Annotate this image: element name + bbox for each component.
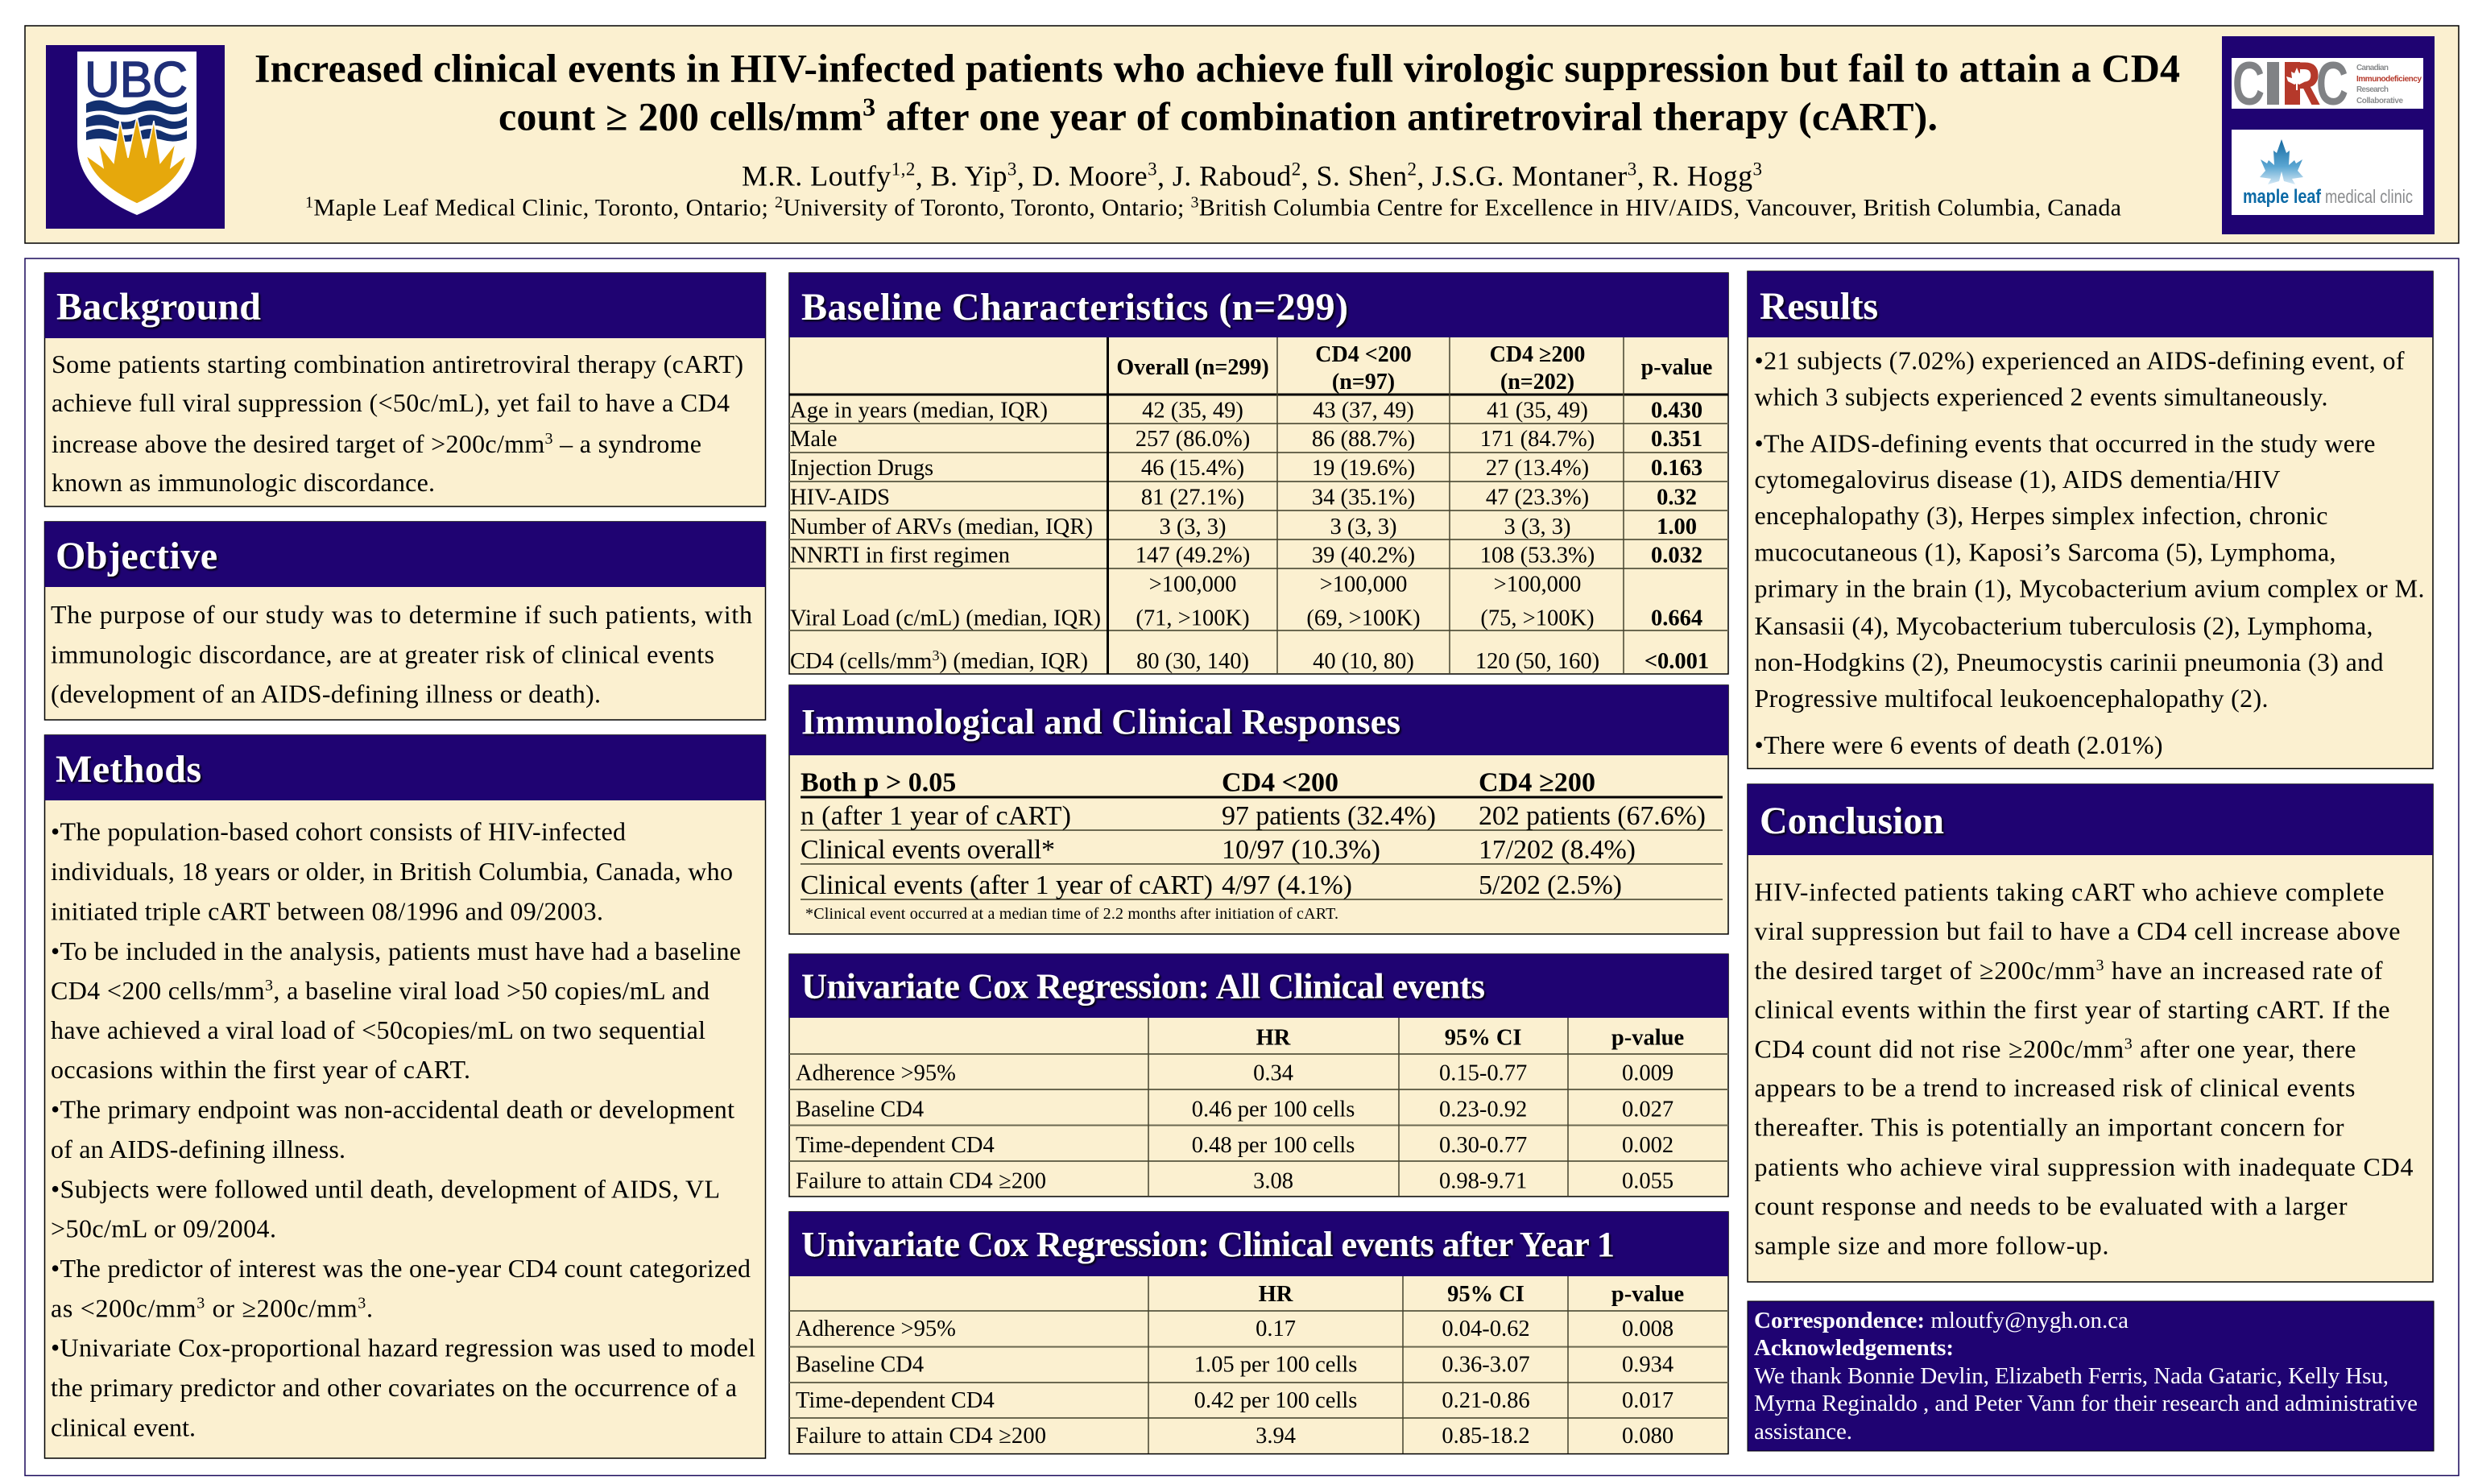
table: cox regression events after year 1: 0.17 [1256,1317,1296,1341]
table: baseline characteristics: (75, >100K) [1480,606,1595,630]
text block: background: 3 [545,430,553,448]
table: baseline characteristics: 39 (40.2%) [1312,543,1415,568]
table: baseline characteristics: 40 (10, 80) [1313,649,1414,674]
text block: methods: or ≥200c/mm [205,1294,358,1323]
table: baseline characteristics: 81 (27.1%) [1141,486,1244,511]
table: cox regression events after year 1: 0.017 [1622,1388,1673,1413]
acknowledgements text: assistance. [1754,1419,1852,1445]
table: baseline characteristics: HIV-AIDS [790,486,890,511]
text block: methods: . [366,1294,373,1323]
table: baseline characteristics: Overall (n=299) [1116,355,1269,380]
table: cox regression events after year 1: Baseline CD4 [796,1353,924,1377]
table: baseline characteristics: 3 (3, 3) [1159,515,1227,539]
table: responses: CD4 <200 [1222,768,1338,798]
table: baseline characteristics: Age in years (median, IQR) [790,399,1048,424]
icon: CIRC logo [2232,50,2423,118]
text block: methods: clinical event. [51,1412,196,1441]
table: cox regression all clinical events: Failure to attain CD4 ≥200 [796,1169,1046,1194]
table: baseline characteristics: 41 (35, 49) [1487,399,1588,424]
icon: UBC logo [46,45,225,229]
text block: background: achieve full viral suppression (<50c/mL), yet fail to have a CD4 [52,388,730,417]
panel: correspondence and acknowledgements [1748,1301,2434,1451]
heading: cox regression all clinical events: Univariate Cox Regression: All Clinical events [801,966,1485,1007]
table: baseline characteristics: (71, >100K) [1136,606,1250,630]
table: responses: 202 patients (67.6%) [1479,801,1706,831]
table: baseline characteristics: 257 (86.0%) [1136,427,1250,452]
icon: CIRC logo: Immunodeficiency [2356,75,2422,84]
text block: methods: occasions within the first year of cART. [51,1055,470,1084]
heading: methods: Methods [56,748,201,791]
text block: results: primary in the brain (1), Mycobacterium avium complex or M. [1754,573,2424,602]
affiliations: 1 [305,194,313,212]
text block: conclusion: appears to be a trend to increased risk of clinical events [1754,1073,2355,1102]
table: baseline characteristics: >100,000 [1320,573,1407,597]
text block: results: which 3 subjects experienced 2 events simultaneously. [1754,382,2327,411]
table: baseline characteristics: 120 (50, 160) [1475,649,1599,674]
text block: conclusion: patients who achieve viral suppression with inadequate CD4 [1754,1152,2413,1181]
heading: background: Background [56,285,261,329]
text block: methods [51,817,755,1441]
authors: M.R. Loutfy [742,160,891,192]
text block: background: – a syndrome [553,429,701,458]
affiliations: 2 [775,194,783,212]
table: cox regression all clinical events: 95% CI [1445,1026,1522,1050]
text block: background: increase above the desired target of >200c/mm [52,429,544,458]
text block: methods: , a baseline viral load >50 copies/mL and [273,976,710,1005]
table: responses: n (after 1 year of cART) [801,801,1071,831]
acknowledgements text: Myrna Reginaldo , and Peter Vann for their research and administrative [1754,1391,2418,1416]
table: baseline characteristics: Male [790,427,838,452]
table: cox regression events after year 1: 0.008 [1622,1317,1673,1341]
authors: 3 [1628,159,1636,180]
table: baseline characteristics: Viral Load (c/mL) (median, IQR) [790,606,1101,630]
authors: , D. Moore [1017,160,1148,192]
icon: maple leaf clinic logo: maple leaf [2243,186,2322,208]
table: baseline characteristics: 147 (49.2%) [1136,543,1250,568]
table: responses: CD4 ≥200 [1479,768,1595,798]
table: cox regression events after year 1: 0.080 [1622,1424,1673,1449]
text block: results: •21 subjects (7.02%) experienced an AIDS-defining event, of [1754,346,2405,375]
text block: background [52,349,743,497]
table: cox regression all clinical events: Baseline CD4 [796,1097,924,1122]
table: baseline characteristics: 86 (88.7%) [1312,427,1415,452]
text block: background: Some patients starting combination antiretroviral therapy (cART) [52,349,743,378]
affiliations: 3 [1191,194,1199,212]
table: baseline characteristics: 0.351 [1651,427,1702,452]
table: baseline characteristics: 3 [932,647,939,663]
table: cox regression events after year 1: 3.94 [1256,1424,1296,1449]
table: baseline characteristics: 171 (84.7%) [1480,427,1595,452]
table: baseline characteristics: 27 (13.4%) [1486,456,1589,481]
table: baseline characteristics: CD4 (cells/mm [790,649,932,674]
text block: methods: •The population-based cohort consists of HIV-infected [51,817,626,846]
text block: results: •There were 6 events of death (2.01%) [1754,730,2163,759]
table: baseline characteristics: 42 (35, 49) [1142,399,1243,424]
table: responses: 97 patients (32.4%) [1222,801,1436,831]
heading: immunological and clinical responses: Immunological and Clinical Responses [801,701,1400,742]
table: baseline characteristics: p-value [1641,355,1712,380]
table: baseline characteristics: 3 (3, 3) [1330,515,1397,539]
table: cox regression all clinical events: 3.08 [1253,1169,1293,1194]
table: responses: Clinical events (after 1 year of cART) [801,870,1213,900]
table: responses [801,768,1723,923]
panel: results [1748,271,2433,768]
title: 3 [863,93,875,122]
authors: , B. Yip [916,160,1007,192]
table: cox regression events after year 1: 0.36-3.07 [1442,1353,1530,1377]
text block: conclusion: CD4 count did not rise ≥200c/mm [1754,1034,2124,1063]
table: baseline characteristics: 1.00 [1657,515,1697,539]
table: cox regression all clinical events: 0.23-0.92 [1439,1097,1527,1122]
table: cox regression events after year 1: 1.05 per 100 cells [1194,1353,1357,1377]
panel: cox regression events after year 1 [789,1212,1728,1454]
table: cox regression events after year 1: 0.42 per 100 cells [1194,1388,1357,1413]
authors: , R. Hogg [1637,160,1752,192]
table: baseline characteristics: NNRTI in first regimen [790,543,1010,568]
table: responses: 4/97 (4.1%) [1222,870,1352,900]
icon: CIRC logo: Canadian [2356,64,2389,72]
table: cox regression all clinical events: HR [1256,1026,1291,1050]
heading: baseline characteristics: Baseline Characteristics (n=299) [801,286,1348,329]
table: baseline characteristics: CD4 <200 [1315,342,1412,367]
table: baseline characteristics: 34 (35.1%) [1312,486,1415,511]
table: baseline characteristics: (n=97) [1332,370,1395,395]
table: responses: Clinical events overall* [801,835,1055,865]
text block: methods: •The predictor of interest was the one-year CD4 count categorized [51,1254,751,1283]
text block: methods: 3 [197,1295,205,1312]
affiliations: British Columbia Centre for Excellence in HIV/AIDS, Vancouver, British Columbia, Canada [1199,195,2121,221]
text block: methods: of an AIDS-defining illness. [51,1135,345,1164]
table: cox regression all clinical events: 0.34 [1253,1061,1293,1086]
text block: conclusion: count response and needs to be evaluated with a larger [1754,1191,2348,1220]
title: Increased clinical events in HIV-infected patients who achieve full virologic suppression but fail to attain a CD4 [254,46,2180,91]
authors: , J.S.G. Montaner [1417,160,1627,192]
affiliations: University of Toronto, Toronto, Ontario; [783,195,1190,221]
table: baseline characteristics: 108 (53.3%) [1480,543,1595,568]
text block: results: encephalopathy (3), Herpes simplex infection, chronic [1754,501,2327,530]
table: baseline characteristics: <0.001 [1645,649,1709,674]
authors: 3 [1752,159,1762,180]
table: cox regression all clinical events: 0.002 [1622,1133,1673,1158]
acknowledgements heading: Acknowledgements: [1754,1335,1954,1361]
panel: immunological and clinical responses [789,685,1728,934]
panel: cox regression all clinical events [789,954,1728,1197]
table: cox regression all clinical events: 0.009 [1622,1061,1673,1086]
heading: cox regression events after year 1: Univariate Cox Regression: Clinical events after Year 1 [801,1224,1615,1264]
table: cox regression all clinical events: 0.98-9.71 [1439,1169,1527,1194]
text block: background: known as immunologic discordance. [52,468,435,497]
table: cox regression events after year 1: 0.04-0.62 [1442,1317,1530,1341]
text block: methods: •The primary endpoint was non-accidental death or development [51,1095,734,1124]
table: cox regression events after year 1: 0.934 [1622,1353,1673,1377]
table: baseline characteristics: >100,000 [1494,573,1581,597]
table: cox regression all clinical events: 0.30-0.77 [1439,1133,1527,1158]
icon: CIRC logo: C [2316,50,2348,118]
authors: 3 [1148,159,1157,180]
panel: objective [45,522,765,720]
text block: methods: >50c/mL or 09/2004. [51,1214,276,1243]
icon: maple leaf clinic logo: medical clinic [2325,186,2413,207]
table: cox regression all clinical events: 0.15-0.77 [1439,1061,1527,1086]
table: cox regression events after year 1: Adherence >95% [796,1317,956,1341]
table: baseline characteristics: Number of ARVs (median, IQR) [790,515,1093,539]
footnote: *Clinical event occurred at a median time of 2.2 months after initiation of cART. [805,905,1338,923]
table: baseline characteristics: 80 (30, 140) [1136,649,1249,674]
table: cox regression events after year 1 [789,1276,1728,1453]
authors: 2 [1292,159,1301,180]
text block: conclusion: HIV-infected patients taking cART who achieve complete [1754,878,2384,907]
icon: CIRC logo: R [2284,50,2321,118]
table: baseline characteristics: ) (median, IQR) [940,649,1088,674]
table: baseline characteristics: 43 (37, 49) [1313,399,1414,424]
panel: background [45,273,765,506]
table: responses: 17/202 (8.4%) [1479,835,1636,865]
table: baseline characteristics: 19 (19.6%) [1312,456,1415,481]
heading: results: Results [1760,285,1878,328]
correspondence: Correspondence: mloutfy@nygh.on.ca [1754,1308,2129,1333]
text block: conclusion: viral suppression but fail to have a CD4 cell increase above [1754,916,2400,945]
icon: maple leaf clinic logo [2232,130,2423,215]
acknowledgements text: We thank Bonnie Devlin, Elizabeth Ferris, Nada Gataric, Kelly Hsu, [1754,1363,2389,1389]
text block: methods: have achieved a viral load of <50copies/mL on two sequential [51,1015,705,1044]
text block: results: Progressive multifocal leukoencephalopathy (2). [1754,684,2268,713]
text block: conclusion: thereafter. This is potentially an important concern for [1754,1113,2344,1142]
table: responses: Both p > 0.05 [801,768,956,798]
authors: , S. Shen [1301,160,1407,192]
table: baseline characteristics: 0.664 [1651,606,1702,630]
table: baseline characteristics: CD4 ≥200 [1490,342,1585,367]
icon: CIRC logo: Collaborative [2356,97,2403,105]
acknowledgements text [1754,1363,2418,1445]
table: cox regression events after year 1: 0.21-0.86 [1442,1388,1530,1413]
table: cox regression events after year 1: 95% CI [1447,1282,1525,1307]
table: baseline characteristics: (n=202) [1500,370,1574,395]
text block: objective: (development of an AIDS-defining illness or death). [51,680,601,709]
title [254,46,2180,139]
text block: methods: initiated triple cART between 08/1996 and 09/2003. [51,897,603,926]
table: cox regression all clinical events [789,1018,1728,1197]
authors: 2 [1408,159,1417,180]
table: baseline characteristics: >100,000 [1149,573,1236,597]
text block: results: Kansasii (4), Mycobacterium tuberculosis (2), Lymphoma, [1754,611,2373,640]
table: cox regression all clinical events: 0.055 [1622,1169,1673,1194]
text block: conclusion: have an increased rate of [2104,956,2383,985]
table: baseline characteristics: 0.163 [1651,456,1702,481]
table: cox regression events after year 1: Time-dependent CD4 [796,1388,995,1413]
table: baseline characteristics: 47 (23.3%) [1486,486,1589,511]
panel: methods [45,735,765,1458]
table: baseline characteristics: 0.032 [1651,543,1702,568]
text block: objective: The purpose of our study was to determine if such patients, with [51,600,752,629]
authors: 3 [1007,159,1016,180]
table: cox regression events after year 1: HR [1259,1282,1293,1307]
icon: CIRC logo: C [2232,50,2265,118]
text block: methods: individuals, 18 years or older, in British Columbia, Canada, who [51,857,733,886]
table: cox regression all clinical events: p-value [1611,1026,1684,1050]
authors: 1,2 [892,159,915,180]
authors: , J. Raboud [1157,160,1291,192]
text block: results: non-Hodgkins (2), Pneumocystis carinii pneumonia (3) and [1754,647,2384,676]
text block: conclusion: after one year, there [2133,1034,2356,1063]
text block: conclusion: clinical events within the first year of starting cART. If the [1754,995,2390,1024]
title: count ≥ 200 cells/mm [499,94,863,139]
panel: baseline characteristics [789,273,1728,674]
text block: conclusion: sample size and more follow-up. [1754,1230,2108,1259]
affiliations: Maple Leaf Medical Clinic, Toronto, Ontario; [313,195,775,221]
text block: conclusion: the desired target of ≥200c/mm [1754,956,2095,985]
title: after one year of combination antiretroviral therapy (cART). [875,94,1938,139]
text block: conclusion: 3 [2124,1035,2133,1053]
heading: conclusion: Conclusion [1760,800,1944,842]
table: cox regression all clinical events: 0.48 per 100 cells [1192,1133,1355,1158]
table: cox regression all clinical events: 0.027 [1622,1097,1673,1122]
text block: conclusion [1754,878,2413,1259]
table: responses: 10/97 (10.3%) [1222,835,1380,865]
table: cox regression events after year 1: p-value [1611,1282,1684,1307]
table: responses: 5/202 (2.5%) [1479,870,1622,900]
table: baseline characteristics: (69, >100K) [1306,606,1421,630]
table: cox regression all clinical events: Time-dependent CD4 [796,1133,995,1158]
table: baseline characteristics: 46 (15.4%) [1141,456,1244,481]
panel: conclusion [1748,784,2433,1282]
table: baseline characteristics: 3 (3, 3) [1504,515,1571,539]
table: baseline characteristics: Injection Drugs [790,456,933,481]
text block: methods: 3 [358,1295,366,1312]
text block: methods: as <200c/mm [51,1294,197,1323]
table: baseline characteristics: 0.32 [1657,486,1697,511]
heading: objective: Objective [56,535,217,577]
table: cox regression events after year 1: Failure to attain CD4 ≥200 [796,1424,1046,1449]
text block: objective: immunologic discordance, are at greater risk of clinical events [51,639,714,668]
text block: conclusion: 3 [2095,957,2104,974]
text block: methods: •Univariate Cox-proportional hazard regression was used to model [51,1333,755,1362]
text block: methods: •To be included in the analysis, patients must have had a baseline [51,936,741,965]
table: cox regression all clinical events: Adherence >95% [796,1061,956,1086]
text block: methods: 3 [265,977,273,994]
table: baseline characteristics: 0.430 [1651,399,1702,424]
text block: methods: CD4 <200 cells/mm [51,976,265,1005]
table: cox regression events after year 1: 0.85-18.2 [1442,1424,1530,1449]
table: cox regression all clinical events: 0.46 per 100 cells [1192,1097,1355,1122]
header banner [25,26,2459,243]
text block: methods: the primary predictor and other covariates on the occurrence of a [51,1373,737,1402]
text block: results: cytomegalovirus disease (1), AIDS dementia/HIV [1754,465,2281,494]
text block: results: mucocutaneous (1), Kaposi’s Sarcoma (5), Lymphoma, [1754,538,2335,567]
text block: results [1754,346,2424,759]
table: baseline characteristics [789,337,1728,674]
text block: methods: •Subjects were followed until death, development of AIDS, VL [51,1174,720,1203]
icon: CIRC logo: Research [2356,85,2389,94]
icon: sponsor logos [2222,36,2435,234]
text block: objective [51,600,752,709]
icon: UBC logo: UBC [85,52,188,108]
text block: results: •The AIDS-defining events that occurred in the study were [1754,428,2376,457]
